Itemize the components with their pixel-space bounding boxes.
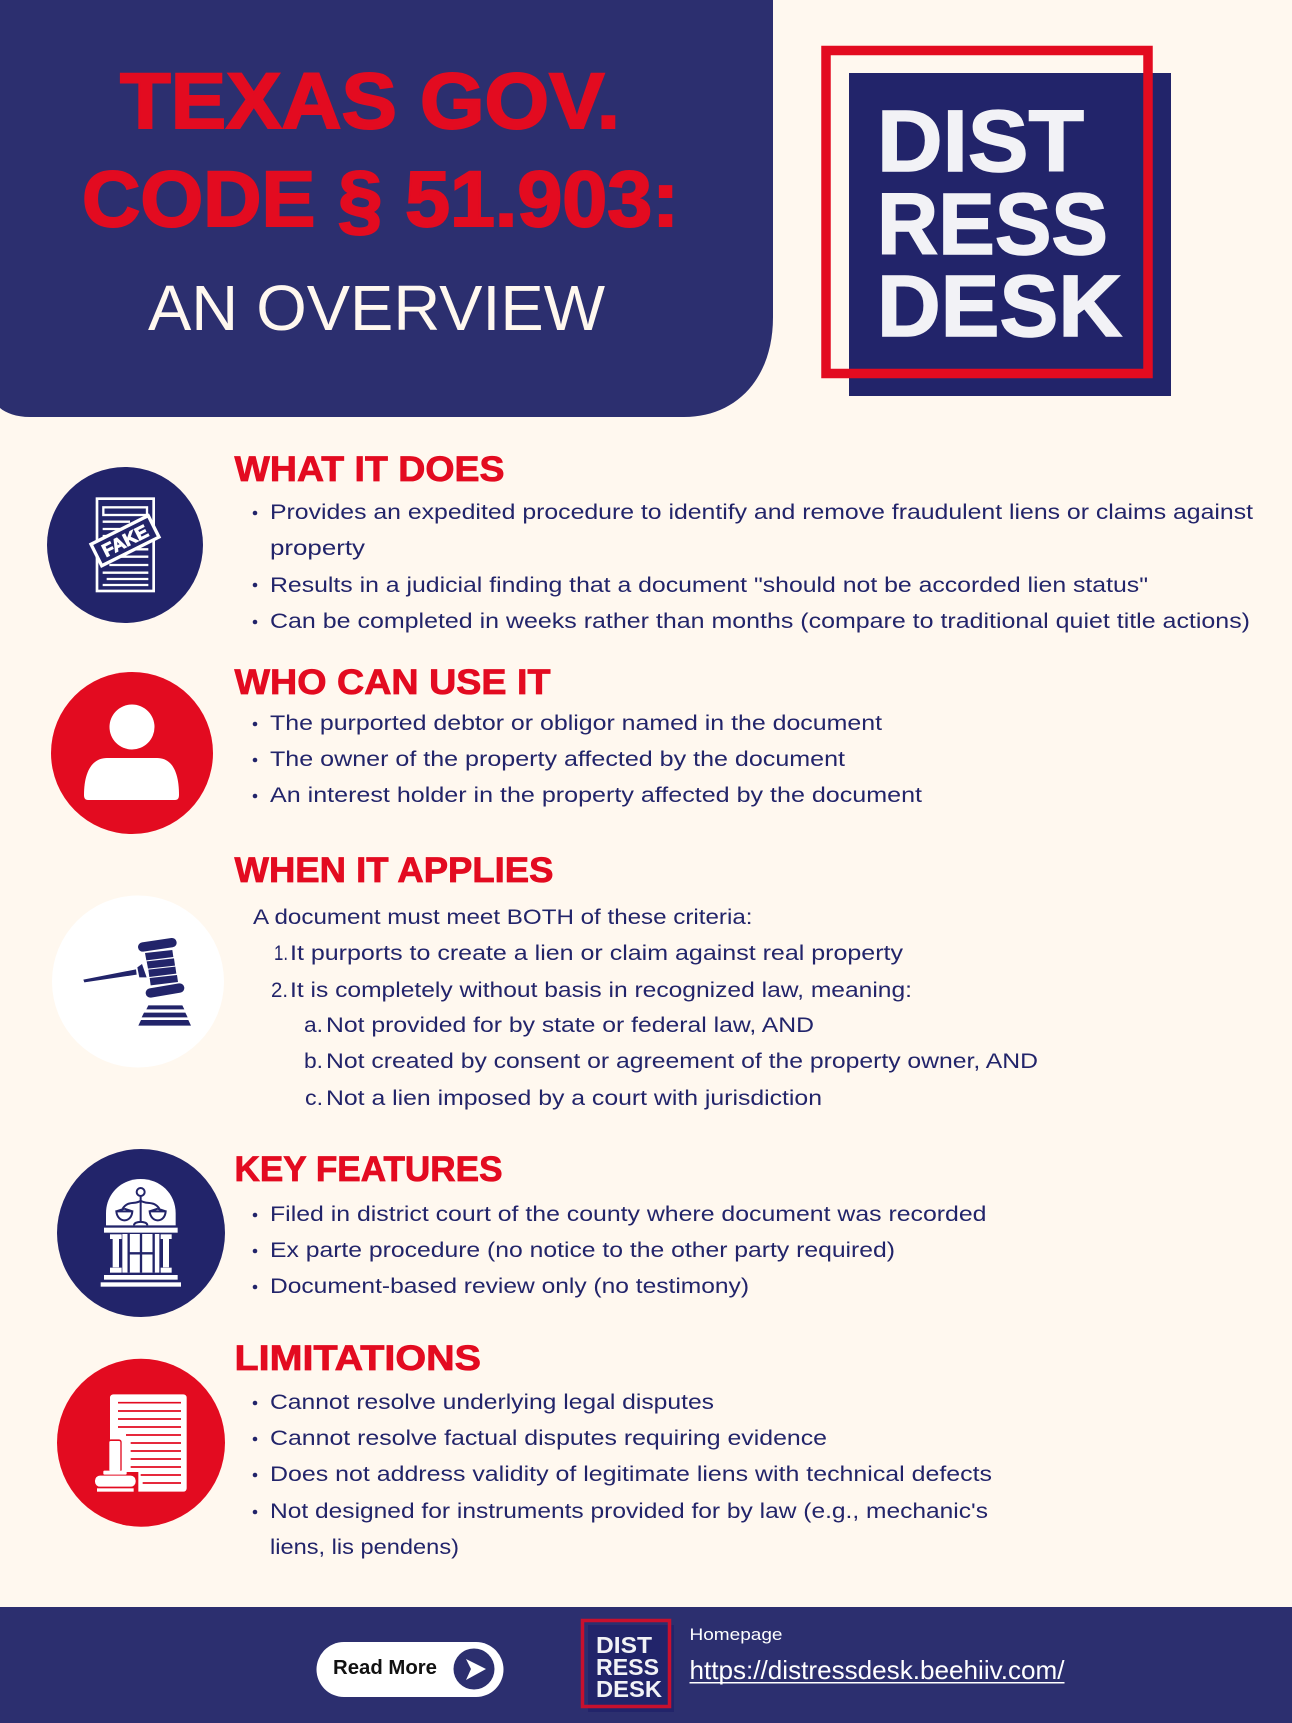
criteria list: A document must meet BOTH of these criteria: xyxy=(253,905,752,929)
icon: person xyxy=(51,672,213,834)
logo: Distress Desk: DESK xyxy=(877,258,1122,355)
icon: gavel xyxy=(52,896,224,1068)
bullet list: An interest holder in the property affected by the document xyxy=(270,783,922,807)
criteria list: 1. xyxy=(274,941,288,965)
section: when it applies xyxy=(52,850,1038,1110)
bullet list: Document-based review only (no testimony) xyxy=(270,1274,749,1298)
criteria list: b. xyxy=(304,1049,323,1073)
icon: arrow xyxy=(454,1648,494,1690)
header panel xyxy=(0,0,773,417)
icon: fake document: FAKE xyxy=(99,521,151,561)
bullet list xyxy=(253,1202,986,1298)
homepage url: https://distressdesk.beehiiv.com/ xyxy=(690,1655,1065,1685)
criteria list: Not provided for by state or federal law, AND xyxy=(326,1013,814,1037)
bullet list xyxy=(253,500,1253,633)
bullet list: liens, lis pendens) xyxy=(270,1535,459,1559)
criteria list xyxy=(253,905,1038,1110)
section: key features xyxy=(57,1149,986,1317)
button: read more: Read More xyxy=(333,1657,437,1679)
bullet list: Does not address validity of legitimate liens with technical defects xyxy=(270,1462,992,1486)
bullet list: Cannot resolve underlying legal disputes xyxy=(270,1390,714,1414)
heading: key features: KEY FEATURES xyxy=(234,1149,502,1189)
criteria list: It purports to create a lien or claim against real property xyxy=(290,941,903,965)
bullet list: Cannot resolve factual disputes requiring evidence xyxy=(270,1426,827,1450)
criteria list: Not a lien imposed by a court with jurisdiction xyxy=(326,1086,822,1110)
footer logo xyxy=(582,1620,674,1712)
criteria list: c. xyxy=(305,1086,323,1110)
bullet list: The owner of the property affected by the document xyxy=(270,747,845,771)
heading: when it applies: WHEN IT APPLIES xyxy=(234,850,554,890)
subtitle: AN OVERVIEW xyxy=(148,272,606,344)
bullet list: Filed in district court of the county where document was recorded xyxy=(270,1202,986,1226)
section: who can use it xyxy=(51,662,922,834)
title: TEXAS GOV. xyxy=(120,56,620,145)
heading: who can use it: WHO CAN USE IT xyxy=(234,662,551,702)
button: read more xyxy=(316,1642,504,1697)
bullet list: Ex parte procedure (no notice to the other party required) xyxy=(270,1238,895,1262)
logo: Distress Desk: RESS xyxy=(877,176,1108,273)
heading: what it does: WHAT IT DOES xyxy=(234,449,504,489)
icon: courthouse xyxy=(57,1149,225,1317)
logo: Distress Desk xyxy=(826,50,1171,396)
bullet list: Provides an expedited procedure to identify and remove fraudulent liens or claims against xyxy=(270,500,1253,524)
bullet list: Can be completed in weeks rather than months (compare to traditional quiet title actions) xyxy=(270,609,1250,633)
bullet list xyxy=(253,1390,992,1559)
title: CODE § 51.903: xyxy=(82,154,679,243)
heading: limitations: LIMITATIONS xyxy=(234,1338,481,1378)
bullet list xyxy=(253,711,922,807)
criteria list: It is completely without basis in recognized law, meaning: xyxy=(290,978,912,1002)
footer logo: DESK xyxy=(596,1676,662,1702)
homepage label: Homepage xyxy=(690,1625,782,1644)
criteria list: Not created by consent or agreement of the property owner, AND xyxy=(326,1049,1038,1073)
logo: Distress Desk: DIST xyxy=(877,93,1084,190)
bullet list: Results in a judicial finding that a document "should not be accorded lien status" xyxy=(270,573,1148,597)
section: limitations xyxy=(57,1338,992,1559)
title xyxy=(82,56,679,243)
icon: fake document xyxy=(47,467,203,623)
criteria list: 2. xyxy=(271,978,288,1002)
section: what it does xyxy=(47,449,1253,633)
bullet list: property xyxy=(270,536,365,560)
icon: stamped document xyxy=(57,1359,225,1527)
footer logo: DIST xyxy=(596,1632,653,1658)
footer logo: RESS xyxy=(596,1654,659,1680)
footer band xyxy=(0,1607,1292,1723)
bullet list: Not designed for instruments provided for by law (e.g., mechanic's xyxy=(270,1499,988,1523)
criteria list: a. xyxy=(304,1013,323,1037)
bullet list: The purported debtor or obligor named in the document xyxy=(270,711,882,735)
